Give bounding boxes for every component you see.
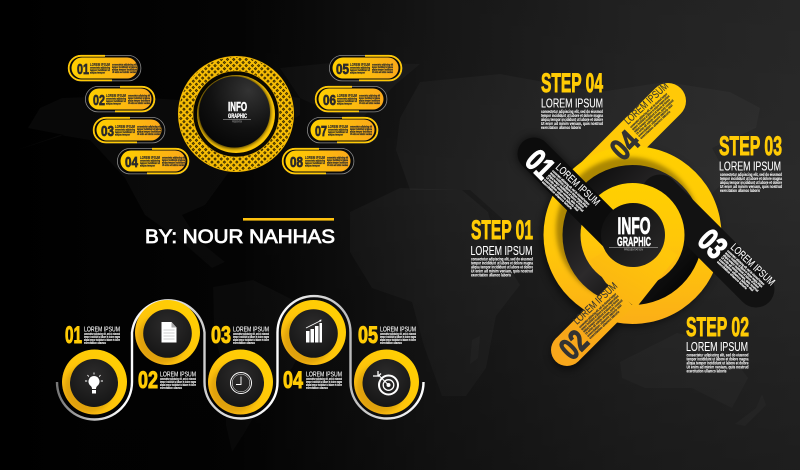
- shadow under the graphic: [534, 149, 719, 353]
- centre disc and bar 01: exercitation ullamco laboris nisi: [543, 178, 580, 212]
- pill 05: consectetur adipiscing elit: [372, 62, 393, 66]
- text block: step 01: aliqua tempor incididunt ut labore et dolore: [471, 264, 533, 270]
- pill 07: aliqua tempor incididunt: [350, 130, 372, 134]
- pill 03: aliqua tempor incididunt: [137, 130, 161, 134]
- panel: bottom-left five step timeline: aliqua tempor incididunt ut labore et dolore: [380, 338, 416, 342]
- pill 03: [93, 117, 165, 143]
- icon: target with arrow: [373, 371, 398, 394]
- bar 02: tempor incididunt ut labore et dolore magna aliqua: [580, 294, 619, 331]
- step label 01: [65, 322, 120, 349]
- bar 02: exercitation ullamco laboris nisi: [586, 303, 623, 338]
- black ring: [562, 165, 702, 305]
- bar 03: LOREM IPSUM: [728, 241, 777, 288]
- pill 03: tempor incididunt ut labore: [137, 127, 161, 131]
- pill 05: LOREM IPSUM: [350, 62, 370, 67]
- text block: step 03: [719, 131, 782, 193]
- text block: step 04: tempor incididunt ut labore et dolore magna: [541, 113, 603, 118]
- pill 03: Ut enim ad minim veniam: [137, 132, 161, 136]
- pill 07: Ut enim ad minim veniam: [350, 132, 372, 136]
- pill 02: [85, 86, 155, 112]
- bar 04 labels: LOREM IPSUM: [622, 80, 671, 127]
- pill 08: consectetur adipiscing: [305, 158, 325, 162]
- pill 05: aliqua tempor incididunt: [372, 68, 393, 72]
- pill 01: aliqua tempor incididunt: [112, 68, 137, 72]
- pill 06: aliqua tempor incididunt: [359, 98, 380, 102]
- step label 05: exercitation ullamco: [380, 341, 403, 345]
- pill 06: LOREM IPSUM: [337, 93, 357, 98]
- pill 06: consectetur adipiscing: [337, 96, 357, 100]
- text block: step 02: Ut enim ad minim veniam, quis nostrud: [686, 364, 749, 370]
- text block: step 01: tempor incididunt ut labore et dolore magna: [471, 260, 533, 266]
- silver connector line: [57, 296, 424, 420]
- bar 03: 03: [691, 222, 734, 265]
- bar 03: exercitation ullamco laboris: [716, 260, 748, 290]
- bar 04: [582, 101, 668, 187]
- medallion: PRESENTATION: [232, 120, 242, 124]
- pill 07: aliqua tempor: [328, 132, 344, 136]
- icon: document: [162, 322, 176, 342]
- centre title: GRAPHIC: [617, 235, 651, 249]
- bar 02: [551, 280, 632, 366]
- pill 07: tempor incididunt ut: [328, 130, 348, 134]
- text block: step 01: LOREM IPSUM: [470, 244, 532, 258]
- step label 04: [283, 367, 342, 394]
- pill 06: aliqua tempor: [337, 102, 353, 106]
- text block: step 02: aliqua tempor incididunt ut labore et dolore: [686, 360, 749, 366]
- step label 02: [138, 367, 196, 394]
- pill 02: aliqua tempor incididunt: [128, 98, 150, 102]
- centre disc and bar 01: LOREM IPSUM: [553, 161, 602, 208]
- pill 07: LOREM IPSUM: [328, 124, 348, 129]
- step label 05: [358, 322, 416, 349]
- text block: step 01: consectetur adipiscing elit, sed do eiusmod: [471, 256, 533, 262]
- text block: step 01: STEP 01: [471, 215, 533, 245]
- medallion: GRAPHIC: [228, 113, 247, 120]
- pill 02: LOREM IPSUM: [106, 93, 126, 98]
- text block: step 04: Ut enim ad minim veniam, quis nostrud: [541, 121, 603, 126]
- bar 04 labels: tempor incididunt ut labore et dolore magna aliqua: [631, 94, 670, 131]
- step label 03: exercitation ullamco: [233, 341, 256, 345]
- medallion: [178, 56, 294, 172]
- step circle 05 with target icon: [354, 350, 419, 414]
- panel: bottom-left five step timeline: tempor incididunt ut labore et dolore magna: [380, 335, 416, 339]
- pill 08: LOREM IPSUM: [305, 155, 325, 160]
- pill 04: consectetur adipiscing elit: [162, 156, 185, 160]
- pill 05: consectetur adipiscing: [350, 66, 370, 70]
- pill 05: aliqua tempor: [350, 70, 366, 74]
- pill 08: [282, 148, 354, 174]
- text block: step 02: STEP 02: [686, 312, 749, 342]
- bar 04 labels: consectetur adipiscing elit, sed do eiusmod tempor: [629, 92, 669, 129]
- text block: step 02: consectetur adipiscing elit, sed do eiusmod: [686, 352, 749, 358]
- step circle 01 with bulb icon: [62, 350, 127, 414]
- panel: right pinwheel infographic: [470, 68, 782, 374]
- pill 03: consectetur adipiscing: [115, 128, 135, 132]
- pill 03: consectetur adipiscing elit: [137, 124, 161, 128]
- bar 03: Ut enim ad minim veniam, quis nostrud: [720, 256, 759, 293]
- pill 01: consectetur adipiscing elit: [112, 62, 137, 66]
- text block: step 04: consectetur adipiscing elit, sed do eiusmod: [541, 109, 603, 114]
- pill 02: consectetur adipiscing: [106, 96, 126, 100]
- pill 07: [307, 117, 378, 143]
- text block: step 04: LOREM IPSUM: [541, 96, 603, 110]
- pill 05: 05: [336, 62, 349, 78]
- ring shadow: [556, 157, 700, 301]
- pill 01: [68, 55, 141, 81]
- step label 03: LOREM IPSUM: [233, 324, 269, 334]
- panel: bottom-left five step timeline: tempor incididunt ut labore et dolore magna: [84, 335, 120, 339]
- world map: [17, 62, 766, 452]
- text block: step 02: tempor incididunt ut labore et dolore magna: [686, 356, 749, 362]
- panel: top-left radial infographic: [68, 55, 402, 174]
- bar 02: 02: [552, 323, 595, 366]
- pill 05: Ut enim ad minim veniam: [372, 70, 393, 74]
- pill 01: aliqua tempor: [90, 70, 106, 74]
- step circle 04 with bar chart icon: [281, 300, 346, 365]
- step label 04: LOREM IPSUM: [306, 370, 342, 378]
- centre disc and bar 01: tempor incididunt ut labore et dolore magna aliqua: [549, 171, 589, 208]
- bar 02: Ut enim ad minim veniam, quis nostrud: [584, 299, 623, 336]
- pill 03: LOREM IPSUM: [115, 124, 135, 129]
- panel: bottom-left five step timeline: aliqua tempor incididunt ut labore et dolore: [306, 383, 342, 387]
- bar 03: exercitation ullamco laboris nisi: [718, 258, 755, 292]
- pill 04: consectetur adipiscing: [140, 158, 160, 162]
- pill 07: tempor incididunt ut labore: [350, 127, 372, 131]
- centre disc and bar 01: exercitation ullamco laboris: [541, 180, 573, 210]
- icon: growth chart: [306, 320, 322, 342]
- bar 03: aliqua tempor incididunt ut labore et dolore: [722, 253, 760, 289]
- bar 04 labels: Ut enim ad minim veniam, quis nostrud: [635, 99, 674, 136]
- pill 08: consectetur adipiscing elit: [327, 156, 348, 160]
- text block: step 04: aliqua tempor incididunt ut labore et dolore: [541, 117, 603, 122]
- pill 01: tempor incididunt ut labore: [112, 65, 137, 69]
- pill 05: tempor incididunt ut: [350, 68, 370, 72]
- pill 07: 07: [315, 124, 327, 140]
- pill 07: consectetur adipiscing: [328, 128, 348, 132]
- pill 02: consectetur adipiscing elit: [128, 94, 150, 98]
- text block: step 01: exercitation ullamco laboris: [471, 272, 511, 278]
- bar 04 labels: exercitation ullamco laboris: [639, 110, 671, 140]
- step label 03: [211, 322, 269, 349]
- panel: bottom-left five step timeline: consectetur adipiscing elit, sed do eiusmod: [160, 377, 196, 381]
- centre title: PRESENTATION: [624, 248, 643, 252]
- pill 03: aliqua tempor: [115, 132, 131, 136]
- title: author credit: BY: NOUR NAHHAS: [145, 226, 335, 248]
- step label 02: 02: [138, 367, 158, 394]
- pill 03: 03: [101, 124, 114, 140]
- pill 01: 01: [77, 62, 89, 78]
- pill 01: Ut enim ad minim veniam: [112, 70, 137, 74]
- pill 04: aliqua tempor: [140, 164, 156, 168]
- panel: bottom-left five step timeline: [57, 296, 424, 420]
- pill 02: tempor incididunt ut labore: [128, 96, 150, 100]
- step label 04: exercitation ullamco: [306, 386, 329, 390]
- pill 02: aliqua tempor: [106, 102, 122, 106]
- icon: clock: [230, 372, 252, 394]
- pill 08: tempor incididunt ut labore: [327, 158, 348, 162]
- bar 04 labels: [603, 80, 683, 167]
- panel: bottom-left five step timeline: aliqua tempor incididunt ut labore et dolore: [84, 338, 120, 342]
- text block: step 02: [686, 312, 749, 374]
- centre disc and bar 01: [519, 143, 665, 267]
- bar 03: tempor incididunt ut labore et dolore magna aliqua: [724, 251, 764, 288]
- pill 04: [117, 148, 189, 174]
- pill 04: aliqua tempor incididunt: [162, 160, 185, 164]
- panel: bottom-left five step timeline: tempor incididunt ut labore et dolore magna: [233, 335, 269, 339]
- panel: bottom-left five step timeline: consectetur adipiscing elit, sed do eiusmod: [233, 332, 269, 336]
- pill 08: tempor incididunt ut: [305, 161, 325, 165]
- panel: bottom-left five step timeline: tempor incididunt ut labore et dolore magna: [306, 380, 342, 384]
- pill 04: tempor incididunt ut: [140, 161, 160, 165]
- pill 02: tempor incididunt ut: [106, 99, 126, 103]
- pill 06: 06: [323, 93, 336, 109]
- pill 01: consectetur adipiscing: [90, 66, 110, 70]
- pill 06: tempor incididunt ut labore: [359, 96, 380, 100]
- bar 02: consectetur adipiscing elit, sed do eiusmod tempor: [578, 292, 618, 329]
- panel: bottom-left five step timeline: consectetur adipiscing elit, sed do eiusmod: [306, 377, 342, 381]
- pill 08: aliqua tempor: [305, 164, 321, 168]
- inner yellow ring with wedge into bar 02: [580, 183, 684, 308]
- centre disc and bar 01: Ut enim ad minim veniam, quis nostrud: [545, 176, 584, 213]
- bar 04 labels: exercitation ullamco laboris nisi: [637, 103, 674, 138]
- text block: step 04: [541, 68, 603, 130]
- step label 02: exercitation ullamco: [160, 386, 183, 390]
- text block: step 04: exercitation ullamco laboris: [541, 125, 581, 130]
- text block: step 01: Ut enim ad minim veniam, quis nostrud: [471, 268, 533, 274]
- pill 02: 02: [93, 93, 105, 109]
- text block: step 04: STEP 04: [541, 68, 603, 98]
- panel: bottom-left five step timeline: aliqua tempor incididunt ut labore et dolore: [160, 383, 196, 387]
- panel: bottom-left five step timeline: consectetur adipiscing elit, sed do eiusmod: [84, 332, 120, 336]
- panel: bottom-left five step timeline: consectetur adipiscing elit, sed do eiusmod: [380, 332, 416, 336]
- step label 01: exercitation ullamco: [84, 341, 107, 345]
- text block: step 03: exercitation ullamco laboris: [720, 188, 760, 193]
- bar 04 labels: aliqua tempor incididunt ut labore et dolore: [633, 98, 671, 133]
- medallion: INFO: [228, 100, 247, 114]
- step circle 03 with clock icon: [208, 350, 273, 414]
- centre disc and bar 01: 01: [519, 143, 562, 186]
- bar 02: aliqua tempor incididunt ut labore et dolore: [582, 298, 620, 333]
- bar 02: LOREM IPSUM: [571, 280, 620, 327]
- pill 01: LOREM IPSUM: [90, 62, 110, 67]
- bar 03: consectetur adipiscing elit, sed do eiusmod tempor: [726, 249, 766, 286]
- bar 04 labels: 04: [603, 123, 647, 167]
- pill 08: aliqua tempor incididunt: [327, 160, 348, 164]
- step label 03: 03: [211, 322, 231, 349]
- centre disc and bar 01: consectetur adipiscing elit, sed do eiusmod tempor: [551, 169, 591, 206]
- pill 03: tempor incididunt ut: [115, 130, 135, 134]
- pill 01: tempor incididunt ut: [90, 68, 110, 72]
- pill 06: tempor incididunt ut: [337, 99, 357, 103]
- centre title: [609, 213, 658, 252]
- pill 07: consectetur adipiscing elit: [350, 124, 372, 128]
- pill 04: 04: [125, 155, 138, 171]
- panel: bottom-left five step timeline: tempor incididunt ut labore et dolore magna: [160, 380, 196, 384]
- pill 02: Ut enim ad minim veniam: [128, 101, 150, 105]
- step circle 02 with document icon: [135, 300, 200, 365]
- pill 05: [329, 55, 402, 81]
- step label 04: 04: [283, 367, 303, 394]
- step label 05: 05: [358, 322, 378, 349]
- pill 04: LOREM IPSUM: [140, 155, 160, 160]
- step label 01: 01: [65, 322, 82, 349]
- panel: bottom-left five step timeline: aliqua tempor incididunt ut labore et dolore: [233, 338, 269, 342]
- bar 02: exercitation ullamco laboris: [588, 310, 620, 340]
- step label 05: LOREM IPSUM: [380, 324, 416, 334]
- pill 06: consectetur adipiscing elit: [359, 94, 380, 98]
- pill 04: tempor incididunt ut labore: [162, 158, 185, 162]
- outer yellow ring: [544, 146, 722, 324]
- centre title: INFO: [618, 213, 650, 240]
- bar 03: [660, 193, 777, 301]
- centre disc and bar 01: aliqua tempor incididunt ut labore et dolore: [547, 173, 585, 209]
- text block: step 02: exercitation ullamco laboris: [686, 368, 727, 374]
- pill 06: [315, 86, 387, 112]
- pill 04: Ut enim ad minim veniam: [162, 163, 185, 167]
- text block: step 02: LOREM IPSUM: [686, 340, 748, 354]
- icon: light bulb: [85, 372, 103, 394]
- step label 02: LOREM IPSUM: [160, 370, 196, 378]
- pill 05: tempor incididunt ut labore: [372, 65, 393, 69]
- text block: step 01: [470, 215, 533, 278]
- step label 01: LOREM IPSUM: [84, 324, 120, 334]
- pill 06: Ut enim ad minim veniam: [359, 101, 380, 105]
- pill 08: 08: [290, 155, 303, 171]
- pill 08: Ut enim ad minim veniam: [327, 163, 348, 167]
